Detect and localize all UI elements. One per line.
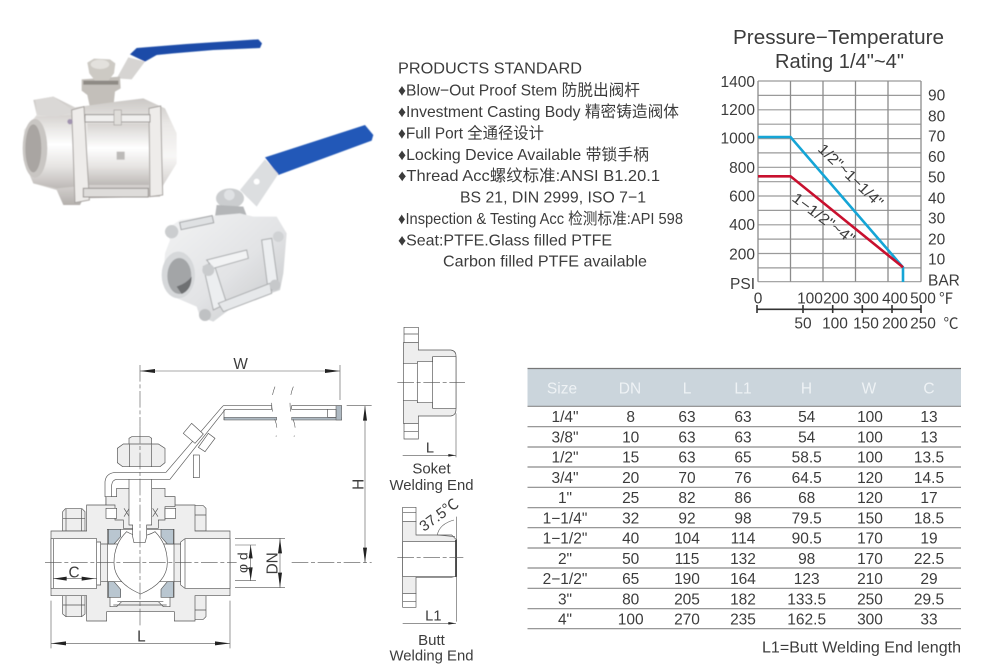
row 1-1/4: 79.5: [792, 510, 822, 528]
blue lever grip: [265, 125, 373, 175]
axis labels: Celsius: 200: [882, 316, 908, 332]
table header: W: [862, 380, 877, 398]
row 4: [558, 612, 938, 628]
dimension DN and phi d: [234, 538, 285, 588]
dimension C: C: [68, 564, 80, 581]
axis labels: Fahrenheit: 100: [797, 290, 823, 308]
curve label: 1-1/2"~4": 1−1/2"~4": [789, 190, 858, 248]
label: soket welding end: Soket: [412, 460, 452, 478]
row 3: 133.5: [787, 592, 826, 608]
row 2: 115: [675, 551, 699, 568]
row 4: 100: [618, 612, 644, 628]
row 3: 205: [674, 592, 700, 608]
row 1/4: 100: [857, 409, 883, 426]
axis labels: BAR: 30: [928, 210, 946, 228]
dimension L1: L1: [425, 609, 441, 625]
chart title: [733, 27, 944, 73]
row 1/4: [551, 409, 938, 426]
axis labels: Fahrenheit: 200: [823, 290, 849, 308]
row 1/2: 1/2": [551, 450, 579, 466]
dimension L: [51, 601, 230, 648]
row 2-1/2: 65: [622, 571, 639, 588]
central cavity: [107, 529, 174, 607]
row 1-1/2: 170: [857, 530, 883, 548]
row 1-1/4: 1−1/4": [543, 510, 587, 528]
row 1: 86: [734, 490, 752, 507]
bolts: [63, 506, 206, 619]
ball seats: [108, 529, 173, 597]
axis labels: BAR: 40: [928, 190, 946, 208]
stem: [129, 473, 152, 543]
row 2-1/2: [543, 571, 938, 588]
row 2-1/2: 123: [794, 571, 820, 588]
row 3/8: 13: [920, 430, 938, 446]
row 2: 132: [730, 551, 756, 568]
row 3: 182: [730, 592, 756, 608]
row 4: 235: [730, 612, 756, 628]
heading: products standard and feature list: ♦Full Port 全通径设计: [398, 124, 544, 142]
detail: butt welding end: [397, 496, 463, 625]
dimension W: [140, 356, 340, 400]
heading: products standard and feature list: Carbon filled PTFE available: [443, 254, 647, 270]
row 3/4: 14.5: [914, 470, 944, 487]
axis labels: BAR: [928, 88, 960, 290]
ball: [114, 532, 167, 594]
row 1/2: [551, 450, 944, 466]
row 1/4: 63: [678, 409, 696, 426]
row 2-1/2: 2−1/2": [543, 571, 587, 588]
row 1/2: 63: [678, 450, 696, 466]
bonnet: [106, 488, 175, 528]
table header: [528, 368, 961, 406]
photo: small ball valve with blue lever: [162, 125, 373, 322]
blue lever grip: [130, 39, 262, 62]
row 2-1/2: 29: [920, 571, 938, 588]
axis labels: Celsius: 150: [853, 316, 879, 332]
row 1-1/4: 98: [734, 510, 752, 528]
row 3/8: 63: [734, 430, 752, 446]
axis labels: Fahrenheit: 300: [853, 290, 879, 308]
dimension DN and phi d: DN: [264, 552, 281, 574]
axis labels: BAR: 90: [928, 88, 946, 104]
heading: products standard and feature list: ♦Investment Casting Body 精密铸造阀体: [398, 103, 679, 121]
table header: DN: [619, 380, 641, 398]
axis labels: PSI: 200: [729, 246, 755, 264]
row 4: 33: [920, 612, 938, 628]
label: butt welding end: [390, 632, 474, 664]
row 1: 82: [678, 490, 696, 507]
label: soket welding end: [390, 460, 474, 494]
row 2-1/2: 210: [857, 571, 883, 588]
heading: products standard and feature list: ♦Inspection & Testing Acc 检测标准:API 598: [398, 210, 683, 228]
row 3/4: 20: [622, 470, 640, 487]
axis labels: BAR: 20: [928, 232, 946, 248]
row 3: [558, 592, 944, 608]
row 2: 2": [558, 551, 572, 568]
row 1-1/4: 18.5: [914, 510, 944, 528]
row 1-1/2: 40: [622, 530, 640, 548]
row 3/8: 54: [798, 430, 816, 446]
row 1/2: 13.5: [914, 450, 944, 466]
dimension H: [347, 406, 372, 563]
row 3/8: 3/8": [551, 430, 579, 446]
row 3/8: 10: [622, 430, 640, 446]
row 1-1/4: [543, 510, 944, 528]
axis labels: PSI: [721, 74, 755, 293]
temperature scale bar: [757, 305, 921, 313]
row 3/4: 76: [734, 470, 752, 487]
heading: products standard and feature list: [398, 60, 683, 270]
row 4: 4": [558, 612, 572, 628]
axis labels: Celsius: [794, 316, 959, 332]
dimension H: H: [350, 479, 367, 490]
technical drawing: valve cross-section: [45, 356, 372, 648]
row 1-1/2: [543, 530, 938, 548]
center lines: [45, 365, 372, 563]
row 2-1/2: 190: [674, 571, 700, 588]
row 2: 22.5: [914, 551, 944, 568]
axis labels: Fahrenheit: 500: [910, 290, 936, 308]
row 3/4: 120: [857, 470, 883, 487]
chart title: Rating 1/4"~4": [775, 51, 904, 73]
axis labels: PSI: 800: [729, 160, 755, 177]
axis labels: BAR: BAR: [928, 272, 960, 290]
row 1-1/2: 114: [731, 530, 756, 548]
detail: socket welding end: [397, 327, 465, 457]
line: 1-1/2"~4" rating (red): [758, 176, 903, 267]
row 1/2: 58.5: [792, 450, 822, 466]
row 2: 170: [857, 551, 883, 568]
dimension L: L: [137, 629, 146, 646]
row 1-1/2: 104: [674, 530, 700, 548]
row 1/4: 8: [626, 409, 635, 426]
photo: large ball valve with blue lever: [23, 39, 262, 205]
dimension DN and phi d: φ d: [234, 552, 250, 573]
row 4: 270: [674, 612, 700, 628]
row 1-1/4: 32: [622, 510, 639, 528]
row 3/4: [551, 470, 944, 487]
axis labels: PSI: PSI: [730, 276, 755, 293]
row 3: 250: [857, 592, 883, 608]
axis labels: BAR: 10: [928, 252, 946, 268]
row 1/2: 100: [857, 450, 883, 466]
row 3/8: 63: [678, 430, 696, 446]
row 3/4: 64.5: [792, 470, 822, 487]
row 1-1/2: 90.5: [792, 530, 822, 548]
axis labels: PSI: 600: [729, 188, 755, 206]
table: dimensions: [528, 368, 961, 629]
table header: C: [923, 380, 935, 398]
row 1-1/2: 19: [920, 530, 938, 548]
dimension L: L: [426, 441, 434, 457]
row 2-1/2: 164: [730, 571, 756, 588]
row 1: 1": [558, 490, 572, 507]
label: soket welding end: Welding End: [390, 477, 474, 494]
heading: products standard and feature list: ♦Blow−Out Proof Stem 防脱出阀杆: [398, 82, 640, 100]
line: 1/2"~1-1/4" rating (blue): [758, 137, 903, 282]
table header: Size: [547, 380, 577, 398]
row 1-1/4: 92: [678, 510, 696, 528]
body: [51, 497, 230, 621]
break marks: [272, 387, 295, 437]
axis labels: Fahrenheit: 400: [882, 290, 908, 308]
row 3: 3": [558, 592, 572, 608]
row 1/4: 63: [734, 409, 752, 426]
row 1: 120: [857, 490, 883, 507]
row 1/4: 13: [920, 409, 938, 426]
row 3/4: 3/4": [551, 470, 579, 487]
heading: products standard and feature list: BS 21, DIN 2999, ISO 7−1: [460, 190, 646, 206]
row 1: 68: [798, 490, 815, 507]
label: butt welding end: Welding End: [390, 648, 474, 664]
lever bolts: [183, 423, 215, 478]
dimension W: W: [233, 356, 248, 373]
row 1-1/4: 150: [857, 510, 883, 528]
heading: products standard and feature list: ♦Thread Acc螺纹标准:ANSI B1.20.1: [398, 167, 660, 185]
curve label: 1/2"~1-1/4": 1/2"~1−1/4": [814, 141, 886, 211]
row 3/8: [551, 430, 938, 446]
row 1/2: 15: [622, 450, 639, 466]
heading: products standard and feature list: PRODUCTS STANDARD: [398, 60, 582, 78]
row 1/4: 1/4": [551, 409, 579, 426]
axis labels: BAR: 60: [928, 149, 946, 166]
row 4: 300: [857, 612, 883, 628]
row 3/8: 100: [857, 430, 883, 446]
row 2: 50: [622, 551, 640, 568]
heading: products standard and feature list: ♦Locking Device Available 带锁手柄: [398, 146, 649, 164]
lever end: [224, 406, 342, 420]
dimension C: [53, 564, 97, 581]
axis labels: PSI: 1000: [721, 130, 755, 148]
axis labels: PSI: 1200: [721, 102, 755, 119]
axis labels: BAR: 50: [928, 170, 946, 186]
right port: [181, 539, 230, 588]
label: 37.5 degree bevel: 37.5℃: [416, 496, 462, 535]
row 3: 29.5: [914, 592, 944, 608]
chart: pressure-temperature rating: [758, 81, 921, 282]
row 1/2: 65: [734, 450, 752, 466]
row 3: 80: [622, 592, 640, 608]
left port: [51, 539, 101, 588]
row 1: [558, 490, 938, 507]
axis labels: Celsius: ℃: [943, 316, 959, 332]
table footnote: L1=Butt Welding End length: [762, 640, 961, 656]
lever arm: [105, 406, 272, 497]
axis labels: PSI: 1400: [721, 74, 755, 91]
axis labels: Celsius: 100: [822, 316, 848, 332]
heading: products standard and feature list: ♦Seat:PTFE.Glass filled PTFE: [398, 232, 612, 250]
axis labels: BAR: 70: [928, 128, 946, 146]
axis labels: PSI: 400: [729, 217, 755, 234]
axis labels: BAR: 80: [928, 108, 946, 126]
row 3/4: 70: [678, 470, 696, 487]
table header: L1: [734, 380, 752, 398]
row 2: 98: [798, 551, 815, 568]
axis labels: Fahrenheit: [754, 290, 954, 308]
row 1: 25: [622, 490, 639, 507]
row 2: [558, 551, 944, 568]
axis labels: Fahrenheit: ℉: [938, 290, 954, 308]
axis labels: Celsius: 50: [794, 316, 812, 332]
label: butt welding end: Butt: [418, 632, 446, 649]
axis labels: Celsius: 250: [910, 316, 936, 332]
row 1/4: 54: [798, 409, 816, 426]
table header: H: [801, 380, 812, 398]
row 4: 162.5: [787, 612, 826, 628]
row 1: 17: [920, 490, 938, 507]
nut: [117, 437, 165, 467]
row 1-1/2: 1−1/2": [543, 530, 587, 548]
chart title: Pressure−Temperature: [733, 27, 944, 49]
axis labels: Fahrenheit: 0: [754, 290, 763, 308]
table header: L: [683, 380, 692, 398]
